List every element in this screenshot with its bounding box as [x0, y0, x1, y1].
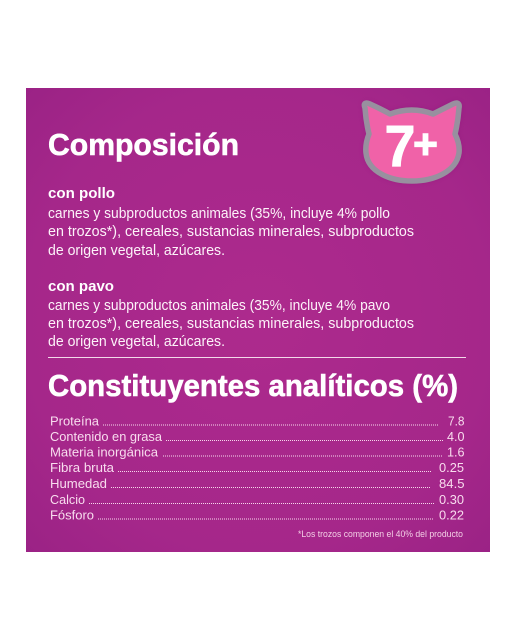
text block: con pollo: carnes y subproductos animales (35%, incluye 4% pollo	[48, 206, 390, 222]
text block: con pavo: carnes y subproductos animales (35%, incluye 4% pavo	[48, 298, 390, 314]
icon: cat head badge 7+: +	[413, 120, 438, 168]
table: analytical constituents: Calcio	[50, 492, 85, 507]
table: analytical constituents: 0.30	[439, 492, 464, 507]
panel: background	[26, 88, 490, 552]
table: analytical constituents: Materia inorgánica	[50, 444, 159, 460]
text block: con pavo	[48, 279, 414, 350]
table: analytical constituents: 0.22	[439, 508, 464, 522]
text block: con pollo	[48, 186, 414, 259]
icon: cat head badge 7+: 7	[384, 114, 416, 179]
text block: con pollo: en trozos*), cereales, sustancias minerales, subproductos	[48, 224, 414, 240]
heading: Constituyentes analíticos: Constituyentes analíticos (%)	[48, 368, 458, 403]
table: analytical constituents: 7.8	[448, 414, 464, 428]
table: analytical constituents: Humedad	[50, 476, 107, 491]
table: analytical constituents: 1.6	[447, 444, 464, 460]
table: analytical constituents: 0.25	[439, 460, 464, 475]
text block: con pavo: de origen vegetal, azúcares.	[48, 334, 225, 350]
table: analytical constituents: Contenido en grasa	[50, 429, 163, 444]
table: analytical constituents: Proteína	[50, 414, 100, 428]
text block: con pollo: de origen vegetal, azúcares.	[48, 243, 225, 259]
text block: con pavo: con pavo	[48, 279, 114, 295]
table: analytical constituents: 4.0	[447, 429, 464, 444]
table: analytical constituents: Fibra bruta	[50, 460, 115, 475]
table: analytical constituents	[50, 414, 464, 522]
icon: cat head badge 7+	[364, 103, 459, 181]
text block: con pavo: en trozos*), cereales, sustancias minerales, subproductos	[48, 316, 414, 332]
table: analytical constituents: Fósforo	[50, 508, 94, 522]
title: Composición: Composición	[48, 127, 239, 162]
text block: con pollo: con pollo	[48, 186, 115, 202]
table: analytical constituents: 84.5	[439, 476, 464, 491]
footnote: *Los trozos componen el 40% del producto	[298, 529, 463, 540]
